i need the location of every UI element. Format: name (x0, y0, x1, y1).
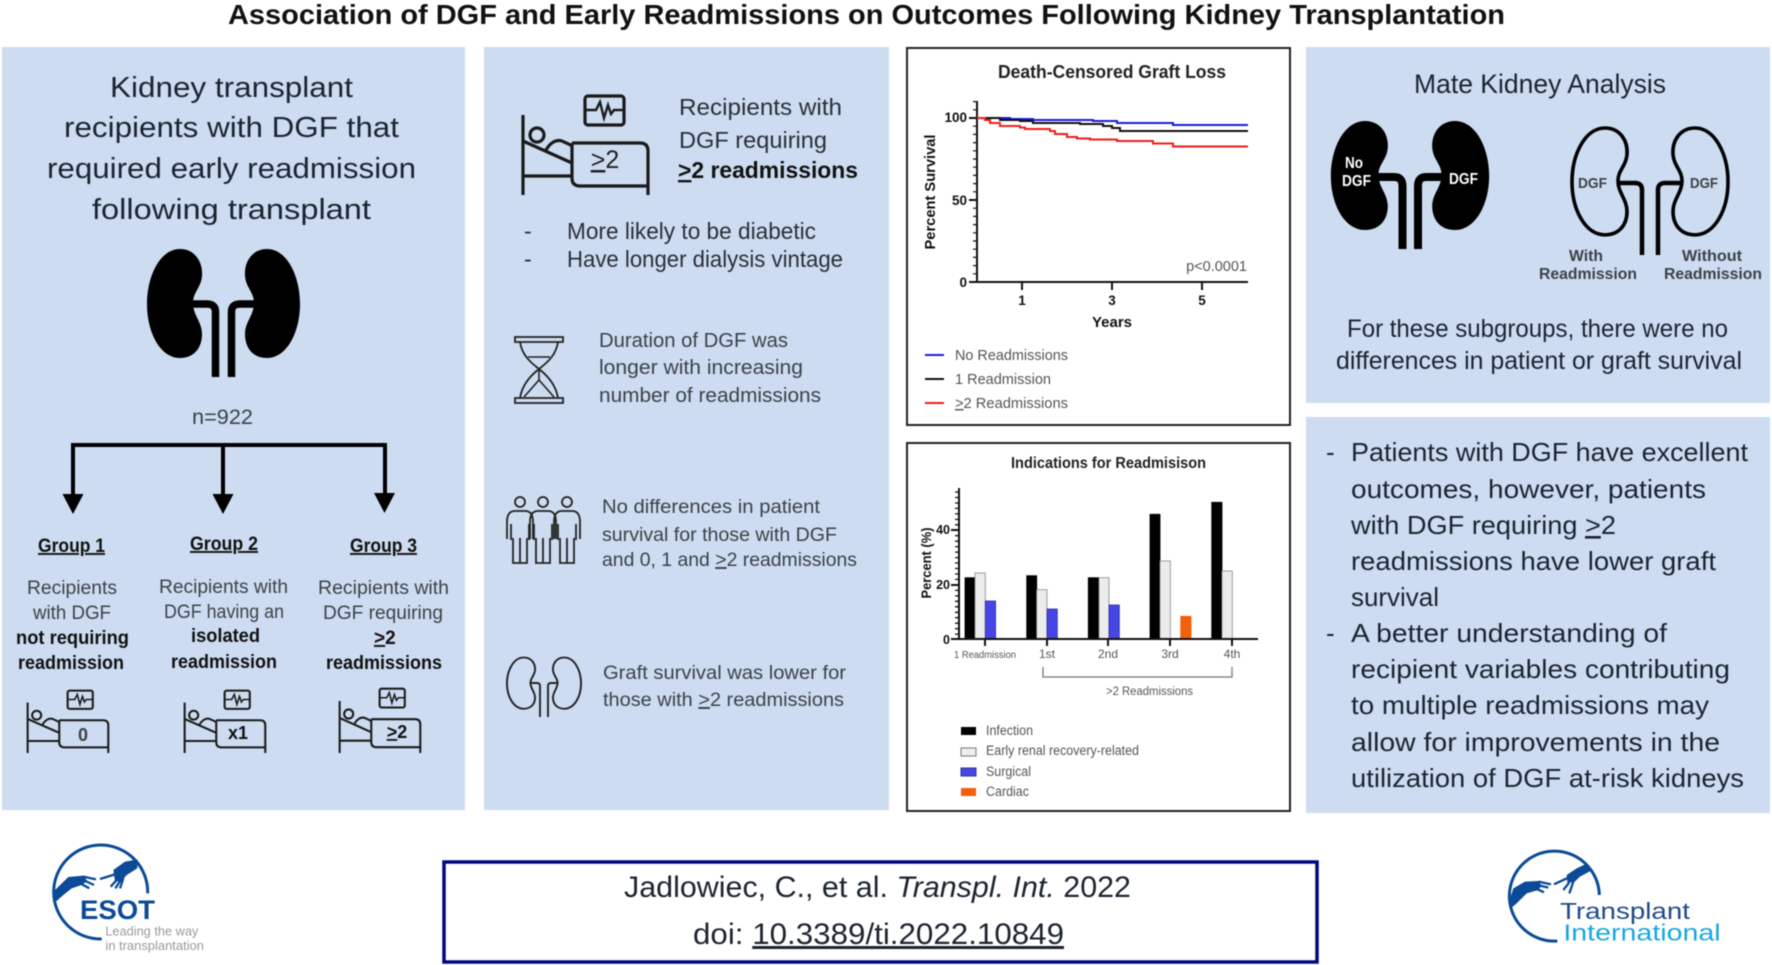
finding: patient survival: survival for those with DGF (602, 524, 837, 546)
finding: recipients requiring >=2 readmissions: >2 readmissions (678, 157, 858, 183)
group 1 (16, 536, 129, 753)
finding: patient survival: No differences in patient (602, 496, 821, 518)
group 2: DGF having an (164, 602, 284, 623)
conclusion 1: readmissions have lower graft (1351, 546, 1717, 576)
group 3: readmissions (326, 653, 442, 674)
list: recipient traits: More likely to be diabetic (567, 218, 816, 244)
group 1: Group 1 (38, 536, 105, 557)
group 3: >2 (374, 628, 396, 649)
flow arrows to three groups (62, 445, 395, 514)
heading: study population (47, 72, 416, 226)
axes: 0 (943, 633, 950, 647)
axes: Percent Survival (922, 134, 939, 250)
conclusion 1: - (1326, 437, 1335, 467)
group 1: not requiring (16, 628, 129, 649)
conclusion 1: outcomes, however, patients (1351, 474, 1706, 504)
labels: with and without readmission: Readmission (1539, 266, 1637, 283)
citation box: doi: 10.3389/ti.2022.10849 (693, 918, 1064, 951)
logo: ESOT: in transplantation (105, 938, 204, 953)
icon: bed x1: x1 (228, 723, 248, 743)
bracket: >=2 readmissions: >2 Readmissions (1106, 686, 1193, 698)
category labels (954, 647, 1240, 661)
mate kidney conclusion: For these subgroups, there were no (1347, 315, 1728, 343)
axes: 100 (944, 110, 967, 125)
axes: 50 (952, 193, 967, 208)
logo: Transplant International: Transplant (1560, 898, 1691, 924)
legend (961, 723, 1139, 799)
conclusion 2: - (1326, 618, 1335, 648)
conclusion 2: A better understanding of (1351, 618, 1668, 648)
category labels: 2nd (1098, 647, 1118, 661)
citation box: Jadlowiec, C., et al. Transpl. Int. 2022 (624, 871, 1131, 904)
icon: three people (507, 497, 580, 563)
group 2: isolated (191, 626, 260, 647)
legend: Early renal recovery-related (986, 743, 1139, 758)
heading: study population: following transplant (92, 194, 371, 226)
icon: solid kidneys (147, 249, 300, 377)
labels: with and without readmission: Without (1682, 248, 1743, 265)
icon: solid mate kidneys: DGF (1449, 171, 1478, 188)
panel: mate kidney analysis (1306, 47, 1770, 403)
group 2: Group 2 (190, 534, 258, 555)
group 3 (318, 536, 449, 753)
axes: 3 (1108, 293, 1116, 308)
axes: Years (1092, 314, 1132, 331)
icon: bed >=2: >2 (387, 722, 407, 742)
icon: solid mate kidneys: No (1345, 155, 1363, 172)
axes (922, 101, 1248, 331)
legend: Infection (986, 723, 1033, 738)
chart title: Indications for Readmisison (1011, 455, 1206, 472)
chart title: Death-Censored Graft Loss (998, 62, 1226, 82)
group 1: with DGF (32, 603, 111, 624)
group 2: Recipients with (159, 577, 288, 598)
heading: Mate Kidney Analysis (1414, 69, 1666, 99)
axes: 0 (959, 275, 967, 290)
category labels: 1 Readmission (954, 649, 1016, 661)
icon: bed 0 (28, 691, 108, 753)
finding: recipients requiring >=2 readmissions (678, 94, 858, 183)
citation box (444, 862, 1317, 962)
category labels: 4th (1224, 647, 1240, 661)
logo: ESOT: ESOT (80, 895, 155, 925)
bracket: >=2 readmissions (1043, 667, 1232, 698)
axes: 20 (936, 578, 950, 592)
group 1: readmission (18, 653, 124, 674)
icon: outline mate kidneys: DGF (1690, 175, 1718, 192)
icon: outline mate kidneys (1572, 128, 1728, 255)
finding: graft survival: Graft survival was lower for (603, 662, 847, 684)
conclusion 1: Patients with DGF have excellent (1351, 437, 1749, 467)
finding: patient survival (602, 496, 857, 571)
finding: graft survival (603, 662, 847, 711)
legend: Cardiac (986, 784, 1029, 799)
conclusion 1: with DGF requiring >2 (1350, 510, 1616, 540)
icon: bed 0: 0 (78, 725, 88, 745)
panel: bar chart (907, 443, 1290, 811)
finding: DGF duration: number of readmissions (599, 385, 821, 407)
list: recipient traits: - (524, 218, 532, 244)
survival curves (977, 118, 1248, 146)
mate kidney conclusion (1336, 315, 1742, 375)
conclusion 2: recipient variables contributing (1351, 654, 1730, 684)
sample size: n=922 (192, 406, 253, 429)
icon: solid mate kidneys: DGF (1342, 173, 1371, 190)
logo: ESOT (54, 845, 204, 953)
panel: survival chart (907, 48, 1290, 425)
icon: hourglass (515, 337, 563, 403)
axes: 1 (1018, 293, 1026, 308)
icon: bed >=2 large (523, 96, 648, 195)
finding: recipients requiring >=2 readmissions: Recipients with (679, 94, 842, 120)
conclusion 1: survival (1351, 582, 1439, 612)
conclusion 1 (1326, 437, 1749, 612)
icon: outline mate kidneys: DGF (1578, 175, 1607, 192)
finding: recipients requiring >=2 readmissions: DGF requiring (679, 127, 827, 153)
heading: study population: Kidney transplant (110, 72, 353, 104)
axes: 40 (936, 523, 950, 537)
group 3: Group 3 (350, 536, 417, 557)
list: recipient traits: - (524, 246, 532, 272)
conclusion 2: allow for improvements in the (1351, 727, 1720, 757)
legend (925, 348, 1068, 412)
list: recipient traits: Have longer dialysis vintage (567, 246, 843, 272)
panel: key findings (484, 47, 889, 810)
finding: patient survival: and 0, 1 and >2 readmissions (602, 549, 857, 571)
list: recipient traits (524, 218, 843, 272)
bars (965, 502, 1232, 639)
finding: DGF duration: Duration of DGF was (599, 330, 788, 352)
conclusion 2: to multiple readmissions may (1351, 690, 1709, 720)
finding: DGF duration: longer with increasing (599, 357, 803, 379)
p value: p<0.0001 (1186, 259, 1247, 275)
category labels: 3rd (1161, 647, 1179, 661)
axes: 5 (1198, 293, 1206, 308)
logo: Transplant International: International (1563, 920, 1721, 946)
finding: graft survival: those with >2 readmissions (603, 689, 844, 711)
mate kidney conclusion: differences in patient or graft survival (1336, 347, 1742, 375)
legend: No Readmissions (955, 348, 1068, 364)
legend: >2 Readmissions (955, 396, 1068, 412)
finding: DGF duration (599, 330, 821, 407)
conclusion 2: utilization of DGF at-risk kidneys (1351, 763, 1744, 793)
group 3: Recipients with (318, 578, 449, 599)
group 3: DGF requiring (323, 603, 443, 624)
labels: with and without readmission: Readmission (1664, 266, 1762, 283)
labels: with and without readmission (1539, 248, 1762, 283)
heading: study population: required early readmission (47, 153, 416, 185)
icon: solid mate kidneys (1331, 121, 1489, 249)
conclusion 2 (1326, 618, 1744, 793)
labels: with and without readmission: With (1569, 248, 1603, 265)
icon: bed >=2 large: >2 (591, 146, 619, 174)
legend: Surgical (986, 764, 1031, 779)
axes: Percent (%) (919, 528, 934, 598)
icon: bed x1 (185, 691, 265, 753)
category labels: 1st (1039, 647, 1056, 661)
group 2: readmission (171, 652, 277, 673)
panel: conclusions (1306, 417, 1770, 813)
icon: bed >=2 (340, 689, 420, 753)
logo: ESOT: Leading the way (105, 924, 199, 939)
axes (919, 488, 1258, 647)
icon: kidney outline (507, 658, 581, 717)
legend: 1 Readmission (955, 372, 1051, 388)
logo: Transplant International (1509, 851, 1721, 946)
group 1: Recipients (27, 578, 117, 599)
heading: study population: recipients with DGF that (64, 112, 399, 144)
group 2 (159, 534, 288, 753)
panel: study population (2, 47, 465, 810)
